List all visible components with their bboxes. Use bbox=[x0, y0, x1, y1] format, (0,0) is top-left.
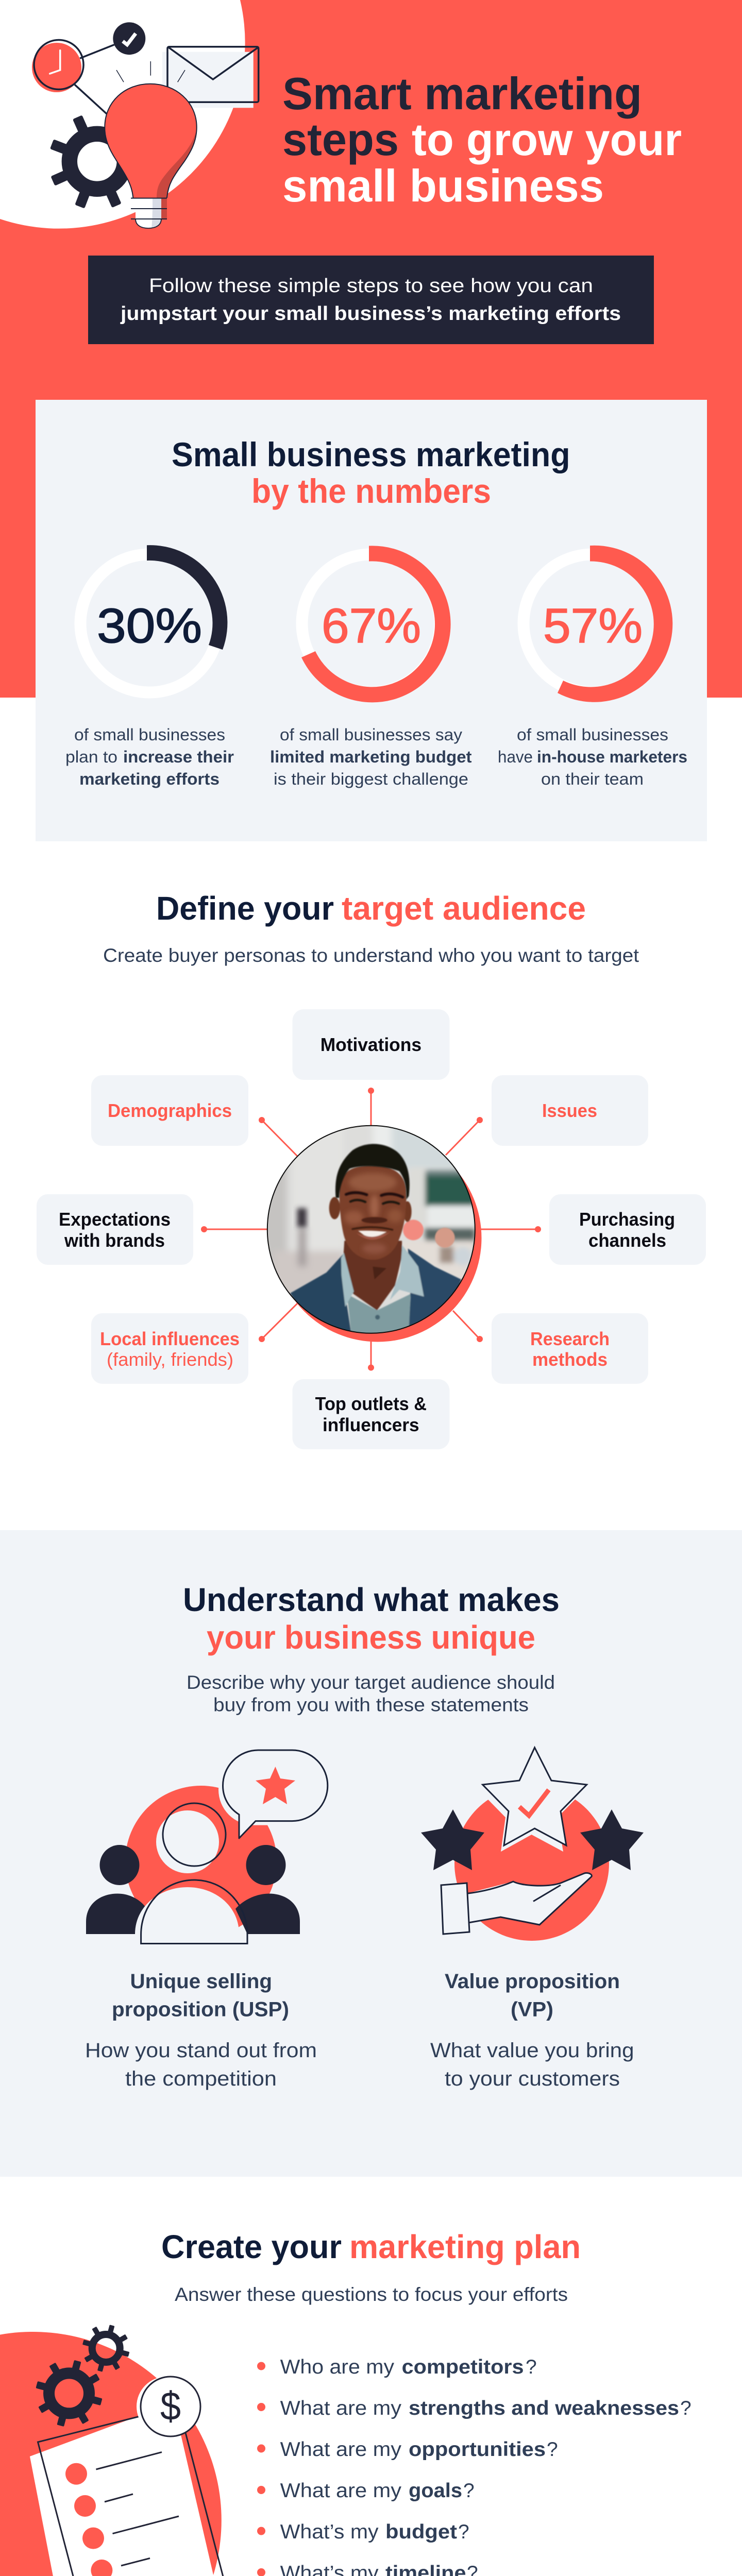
panel: header bbox=[0, 0, 742, 698]
stat caption: 67%: is their biggest challenge bbox=[274, 770, 468, 788]
stat caption: 57%: on their team bbox=[541, 770, 644, 788]
question list bbox=[257, 2356, 692, 2576]
icon: value proposition hand and stars bbox=[421, 1748, 644, 1941]
box: purchasing channels: channels bbox=[588, 1230, 666, 1251]
donut chart: 67%: 67% bbox=[322, 599, 421, 653]
donut chart: 57% bbox=[524, 546, 672, 702]
text: value proposition bbox=[430, 1970, 634, 2090]
text: unique selling proposition: the competition bbox=[125, 2067, 277, 2090]
text: unique selling proposition bbox=[85, 1970, 317, 2090]
question: goals bbox=[257, 2480, 475, 2502]
icon: connected clock, check, envelope, gear and light bulb bbox=[32, 22, 259, 228]
donut chart: 30%: 30% bbox=[97, 599, 202, 653]
heading: by the numbers bbox=[251, 472, 491, 510]
donut chart: 30% bbox=[80, 545, 227, 692]
stat caption: 57% bbox=[498, 725, 687, 788]
stat caption: 57%: have bbox=[498, 748, 533, 766]
question: strengths and weaknesses: ? bbox=[680, 2397, 692, 2419]
stat caption: 30%: marketing efforts bbox=[79, 770, 220, 788]
title: small business bbox=[282, 160, 604, 211]
text: unique selling proposition: proposition (USP) bbox=[112, 1998, 289, 2021]
question: opportunities: What are my bbox=[280, 2438, 402, 2461]
box: research methods: Research bbox=[530, 1328, 610, 1349]
box: local influences: (family, friends) bbox=[107, 1349, 233, 1370]
stat caption: 67%: limited marketing budget bbox=[270, 748, 472, 766]
question: budget: ? bbox=[458, 2521, 469, 2543]
heading bbox=[161, 2228, 581, 2265]
box: purchasing channels bbox=[549, 1194, 706, 1265]
text: value proposition: Value proposition bbox=[445, 1970, 620, 1993]
title: Smart marketing bbox=[282, 68, 642, 119]
heading bbox=[172, 435, 570, 510]
question: strengths and weaknesses bbox=[257, 2397, 692, 2419]
subtitle bbox=[187, 1672, 555, 1716]
box: motivations bbox=[293, 1009, 449, 1080]
question: competitors bbox=[257, 2356, 537, 2378]
heading: your business unique bbox=[207, 1619, 535, 1656]
illustration: checklist with gears, coin, clock and star: $ bbox=[160, 2383, 181, 2429]
header red background bbox=[0, 0, 742, 698]
stat caption: 30%: plan to bbox=[65, 748, 117, 766]
persona portrait bbox=[263, 1121, 484, 1342]
question: budget: budget bbox=[385, 2521, 457, 2543]
heading: Small business marketing bbox=[172, 435, 570, 473]
stat caption: 57%: of small businesses bbox=[517, 725, 668, 744]
text: unique selling proposition: Unique selling bbox=[130, 1970, 272, 1993]
heading bbox=[156, 890, 586, 927]
question: budget: What’s my bbox=[280, 2521, 379, 2543]
box: purchasing channels: Purchasing bbox=[579, 1209, 675, 1230]
stat caption: 30%: of small businesses bbox=[74, 725, 225, 744]
subtitle: Create buyer personas to understand who you want to target bbox=[103, 945, 639, 966]
text: value proposition: (VP) bbox=[511, 1998, 553, 2021]
box: issues bbox=[492, 1075, 648, 1146]
icon: unique selling proposition people and speech bubble bbox=[86, 1750, 328, 1944]
question: competitors: Who are my bbox=[280, 2356, 395, 2378]
intro callout: Follow these simple steps to see how you can bbox=[149, 275, 593, 297]
box: top outlets and influencers bbox=[293, 1379, 449, 1449]
stat caption: 67% bbox=[270, 725, 472, 788]
panel: what makes your business unique bbox=[0, 1530, 742, 2177]
subtitle: buy from you with these statements bbox=[213, 1694, 529, 1716]
title: to grow your bbox=[412, 114, 682, 165]
title bbox=[282, 68, 682, 211]
box: expectations with brands: with brands bbox=[64, 1230, 165, 1251]
panel: define your target audience bbox=[37, 890, 706, 1449]
panel: create your marketing plan bbox=[0, 2228, 692, 2576]
donut chart: 57%: 57% bbox=[543, 599, 643, 653]
title: steps bbox=[282, 114, 399, 165]
white corner blob bbox=[0, 0, 245, 229]
box: expectations with brands bbox=[37, 1194, 193, 1265]
stat caption: 30%: increase their bbox=[123, 748, 234, 766]
box: demographics: Demographics bbox=[108, 1100, 232, 1121]
question: opportunities: opportunities bbox=[409, 2438, 546, 2461]
box: local influences bbox=[91, 1313, 248, 1384]
text: value proposition: What value you bring bbox=[430, 2039, 634, 2062]
question: opportunities: ? bbox=[547, 2438, 558, 2461]
intro callout bbox=[88, 256, 654, 344]
panel: by the numbers bbox=[36, 400, 707, 841]
subtitle: Answer these questions to focus your efforts bbox=[175, 2284, 568, 2305]
box: expectations with brands: Expectations bbox=[59, 1209, 171, 1230]
question: opportunities bbox=[257, 2438, 558, 2461]
subtitle: Describe why your target audience should bbox=[187, 1672, 555, 1693]
heading: Create your bbox=[161, 2228, 342, 2265]
box: top outlets and influencers: Top outlets & bbox=[315, 1393, 427, 1414]
box: top outlets and influencers: influencers bbox=[323, 1414, 419, 1435]
stat caption: 57%: in-house marketers bbox=[537, 748, 687, 766]
question: competitors: ? bbox=[526, 2356, 537, 2378]
text: value proposition: to your customers bbox=[445, 2067, 620, 2090]
intro callout: jumpstart your small business’s marketing efforts bbox=[120, 303, 621, 325]
numbers card background bbox=[36, 400, 707, 841]
heading: Define your bbox=[156, 890, 334, 927]
question: goals: ? bbox=[463, 2480, 475, 2502]
section background bbox=[0, 1530, 742, 2177]
question: budget bbox=[257, 2521, 469, 2543]
box: research methods: methods bbox=[532, 1349, 608, 1370]
box: research methods bbox=[492, 1313, 648, 1384]
illustration: checklist with gears, coin, clock and star bbox=[0, 2325, 224, 2576]
text: unique selling proposition: How you stand out from bbox=[85, 2039, 317, 2062]
question: competitors: competitors bbox=[402, 2356, 524, 2378]
stat caption: 67%: of small businesses say bbox=[280, 725, 462, 744]
question: timeline bbox=[257, 2562, 478, 2576]
question: strengths and weaknesses: strengths and weaknesses bbox=[409, 2397, 679, 2419]
question: strengths and weaknesses: What are my bbox=[280, 2397, 402, 2419]
heading: marketing plan bbox=[349, 2228, 581, 2265]
question: goals: goals bbox=[409, 2480, 462, 2502]
box: demographics bbox=[91, 1075, 248, 1146]
donut chart: 67% bbox=[301, 546, 451, 702]
heading bbox=[183, 1581, 560, 1656]
heading: Understand what makes bbox=[183, 1581, 560, 1618]
box: local influences: Local influences bbox=[100, 1328, 240, 1349]
connector lines bbox=[201, 1088, 541, 1370]
heading: target audience bbox=[342, 890, 586, 927]
box: motivations: Motivations bbox=[321, 1034, 421, 1055]
box: issues: Issues bbox=[542, 1100, 597, 1121]
question: goals: What are my bbox=[280, 2480, 402, 2502]
stat caption: 30% bbox=[65, 725, 234, 788]
